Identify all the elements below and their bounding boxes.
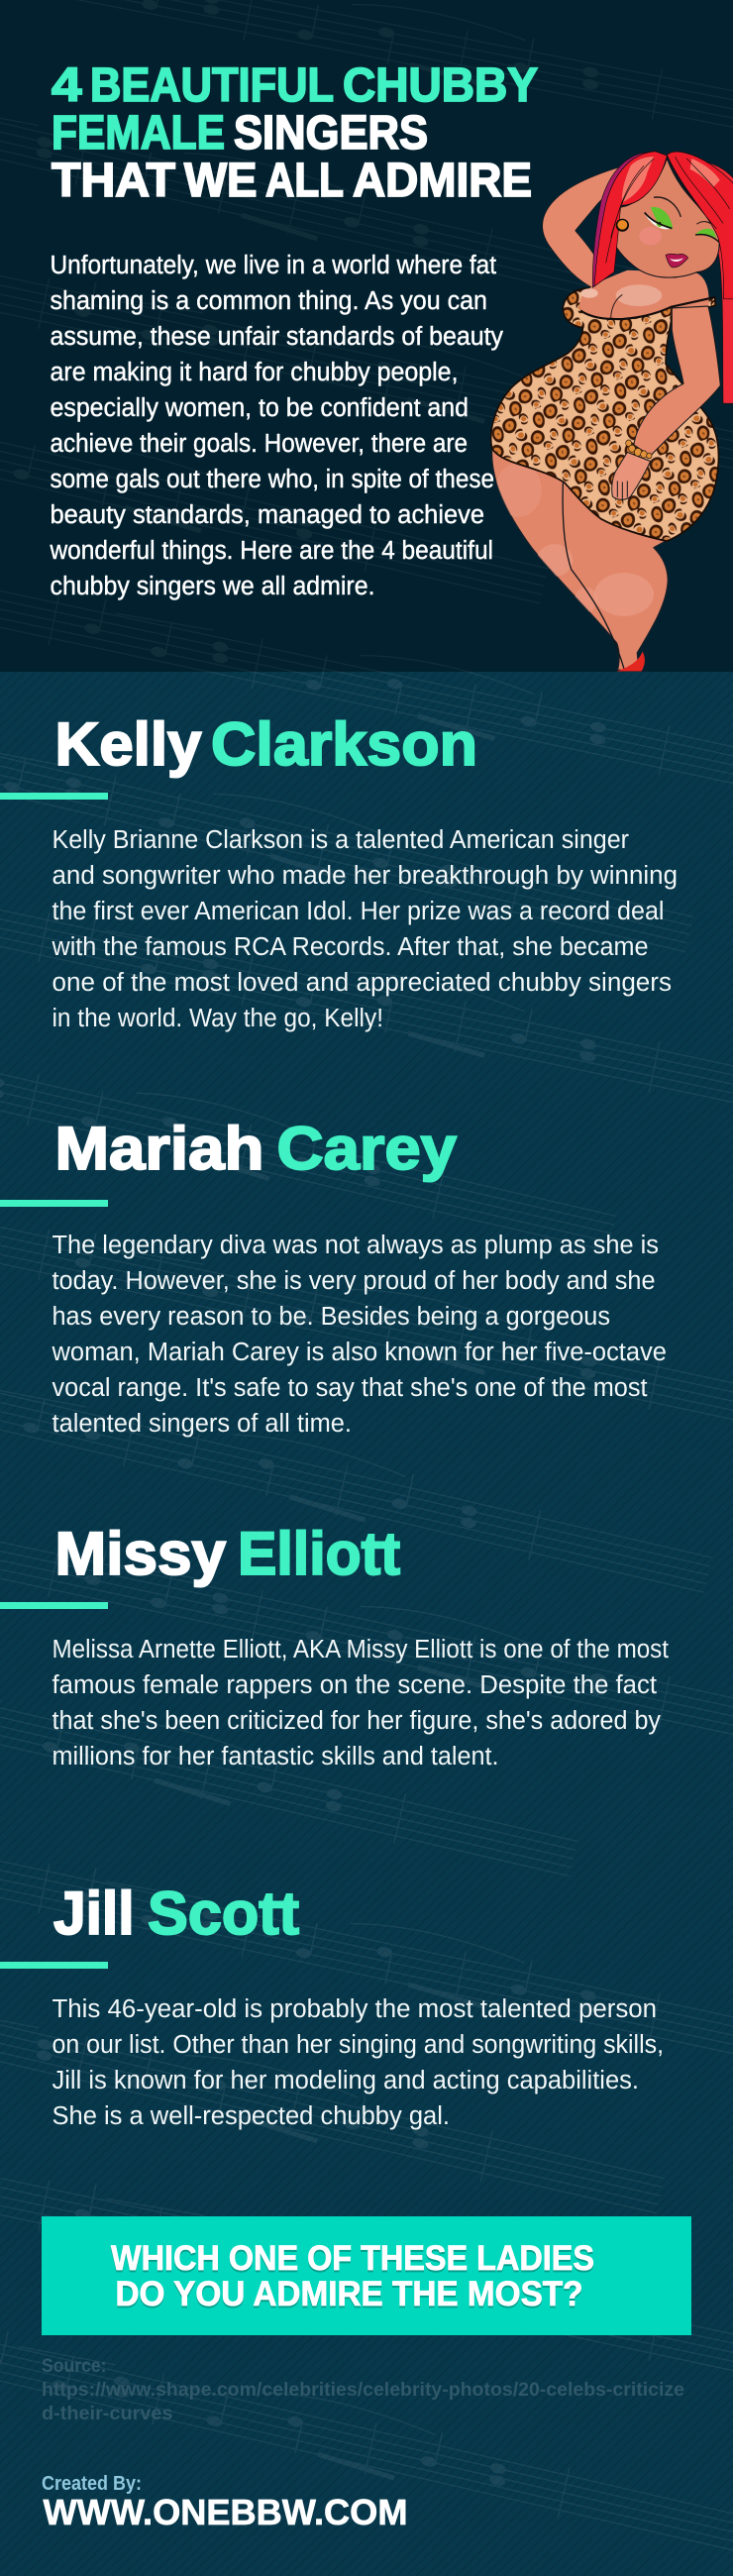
illustration: woman in leopard dress: [491, 152, 733, 672]
text block: famous female rappers on the scene. Despite the fact: [52, 1671, 657, 1699]
text block: one of the most loved and appreciated chubby singers: [52, 969, 672, 997]
lips: [666, 254, 688, 268]
intro text: chubby singers we all admire.: [50, 573, 374, 600]
face: [611, 159, 719, 277]
text block: Melissa Arnette Elliott, AKA Missy Elliott is one of the most: [52, 1636, 669, 1664]
intro text: beauty standards, managed to achieve: [50, 501, 484, 529]
heading: Jill Scott: Scott: [148, 1879, 299, 1947]
source: Source:: [42, 2356, 107, 2377]
callout: WHICH ONE OF THESE LADIES: [111, 2239, 594, 2278]
intro text: some gals out there who, in spite of these: [50, 466, 494, 493]
text block: The legendary diva was not always as plump as she is: [52, 1232, 659, 1259]
source: d-their-curves: [42, 2404, 172, 2424]
earring: [616, 219, 629, 232]
heading: Mariah Carey: Carey: [277, 1115, 457, 1182]
title: THAT: [52, 155, 175, 207]
bracelet: [626, 440, 652, 459]
callout: [42, 2216, 691, 2335]
shoe: [616, 651, 645, 672]
text block: in the world. Way the go, Kelly!: [52, 1005, 383, 1032]
text block: She is a well-respected chubby gal.: [52, 2102, 450, 2130]
heading: Missy Elliott: [55, 1520, 400, 1587]
accent bar: [0, 793, 108, 800]
intro text: are making it hard for chubby people,: [50, 359, 458, 386]
intro text: shaming is a common thing. As you can: [50, 287, 487, 315]
accent bar: [0, 1200, 108, 1207]
title: CHUBBY: [343, 59, 538, 112]
heading: Mariah Carey: [55, 1115, 457, 1182]
callout: DO YOU ADMIRE THE MOST?: [115, 2275, 582, 2313]
credit: WWW.ONEBBW.COM: [44, 2492, 408, 2532]
title: 4: [52, 59, 82, 112]
heading: Kelly Clarkson: [55, 710, 477, 778]
panel: Missy Elliott: [0, 1520, 669, 1771]
heading: Kelly Clarkson: Kelly: [55, 710, 202, 778]
title: ADMIRE: [353, 155, 532, 207]
source: https://www.shape.com/celebrities/celebrity-photos/20-celebs-criticize: [42, 2380, 684, 2401]
text block: with the famous RCA Records. After that, she became: [52, 933, 648, 961]
text block: [52, 826, 678, 1032]
text block: woman, Mariah Carey is also known for her five-octave: [52, 1339, 667, 1366]
panel: header: [50, 59, 733, 672]
legs: [492, 449, 668, 671]
heading: Kelly Clarkson: Clarkson: [211, 710, 477, 778]
title: [52, 59, 538, 207]
text block: millions for her fantastic skills and talent.: [52, 1743, 499, 1771]
intro text: achieve their goals. However, there are: [50, 430, 468, 458]
chest: [579, 270, 715, 319]
accent bar: [0, 1962, 108, 1969]
intro text: especially women, to be confident and: [50, 394, 469, 422]
heading: Missy Elliott: Missy: [55, 1520, 226, 1587]
text block: Jill is known for her modeling and acting capabilities.: [52, 2067, 639, 2094]
heading: Jill Scott: Jill: [53, 1879, 135, 1947]
lower arm and hand: [612, 306, 720, 499]
text block: talented singers of all time.: [52, 1410, 352, 1438]
right hair strand: [707, 162, 733, 404]
text block: the first ever American Idol. Her prize was a record deal: [52, 898, 664, 925]
dress: [491, 288, 718, 541]
intro text: Unfortunately, we live in a world where fat: [50, 252, 496, 279]
intro text: [50, 252, 503, 600]
accent bar: [0, 1602, 108, 1609]
left eye: [645, 197, 681, 229]
credit: [42, 2473, 408, 2532]
intro text: assume, these unfair standards of beauty: [50, 323, 503, 351]
panel: Jill Scott: [0, 1879, 664, 2130]
text block: and songwriter who made her breakthrough by winning: [52, 862, 678, 890]
text block: This 46-year-old is probably the most talented person: [52, 1995, 657, 2023]
title: SINGERS: [234, 107, 428, 160]
title: ALL: [265, 155, 344, 207]
heading: Jill Scott: [53, 1879, 299, 1947]
text block: Kelly Brianne Clarkson is a talented American singer: [52, 826, 629, 854]
panel: Kelly Clarkson: [0, 710, 678, 1032]
title: BEAUTIFUL: [90, 59, 334, 112]
text block: has every reason to be. Besides being a gorgeous: [52, 1303, 610, 1331]
text block: [52, 1995, 664, 2130]
text block: vocal range. It's safe to say that she's one of the most: [52, 1374, 648, 1402]
hair front: [594, 152, 733, 299]
text block: today. However, she is very proud of her body and she: [52, 1267, 656, 1295]
intro text: wonderful things. Here are the 4 beautiful: [50, 537, 493, 565]
source: [42, 2356, 684, 2424]
right eye: [695, 222, 719, 242]
panel: Mariah Carey: [0, 1115, 667, 1438]
title: WE: [184, 155, 258, 207]
credit: Created By:: [42, 2473, 142, 2495]
left hair back: [592, 152, 654, 287]
heading: Missy Elliott: Elliott: [238, 1520, 400, 1587]
text block: [52, 1636, 669, 1771]
heading: Mariah Carey: Mariah: [55, 1115, 263, 1182]
text block: [52, 1232, 667, 1438]
raised arm: [543, 165, 624, 289]
text block: that she's been criticized for her figure, she's adored by: [52, 1707, 661, 1735]
title: FEMALE: [52, 107, 225, 160]
text block: on our list. Other than her singing and songwriting skills,: [52, 2031, 664, 2059]
